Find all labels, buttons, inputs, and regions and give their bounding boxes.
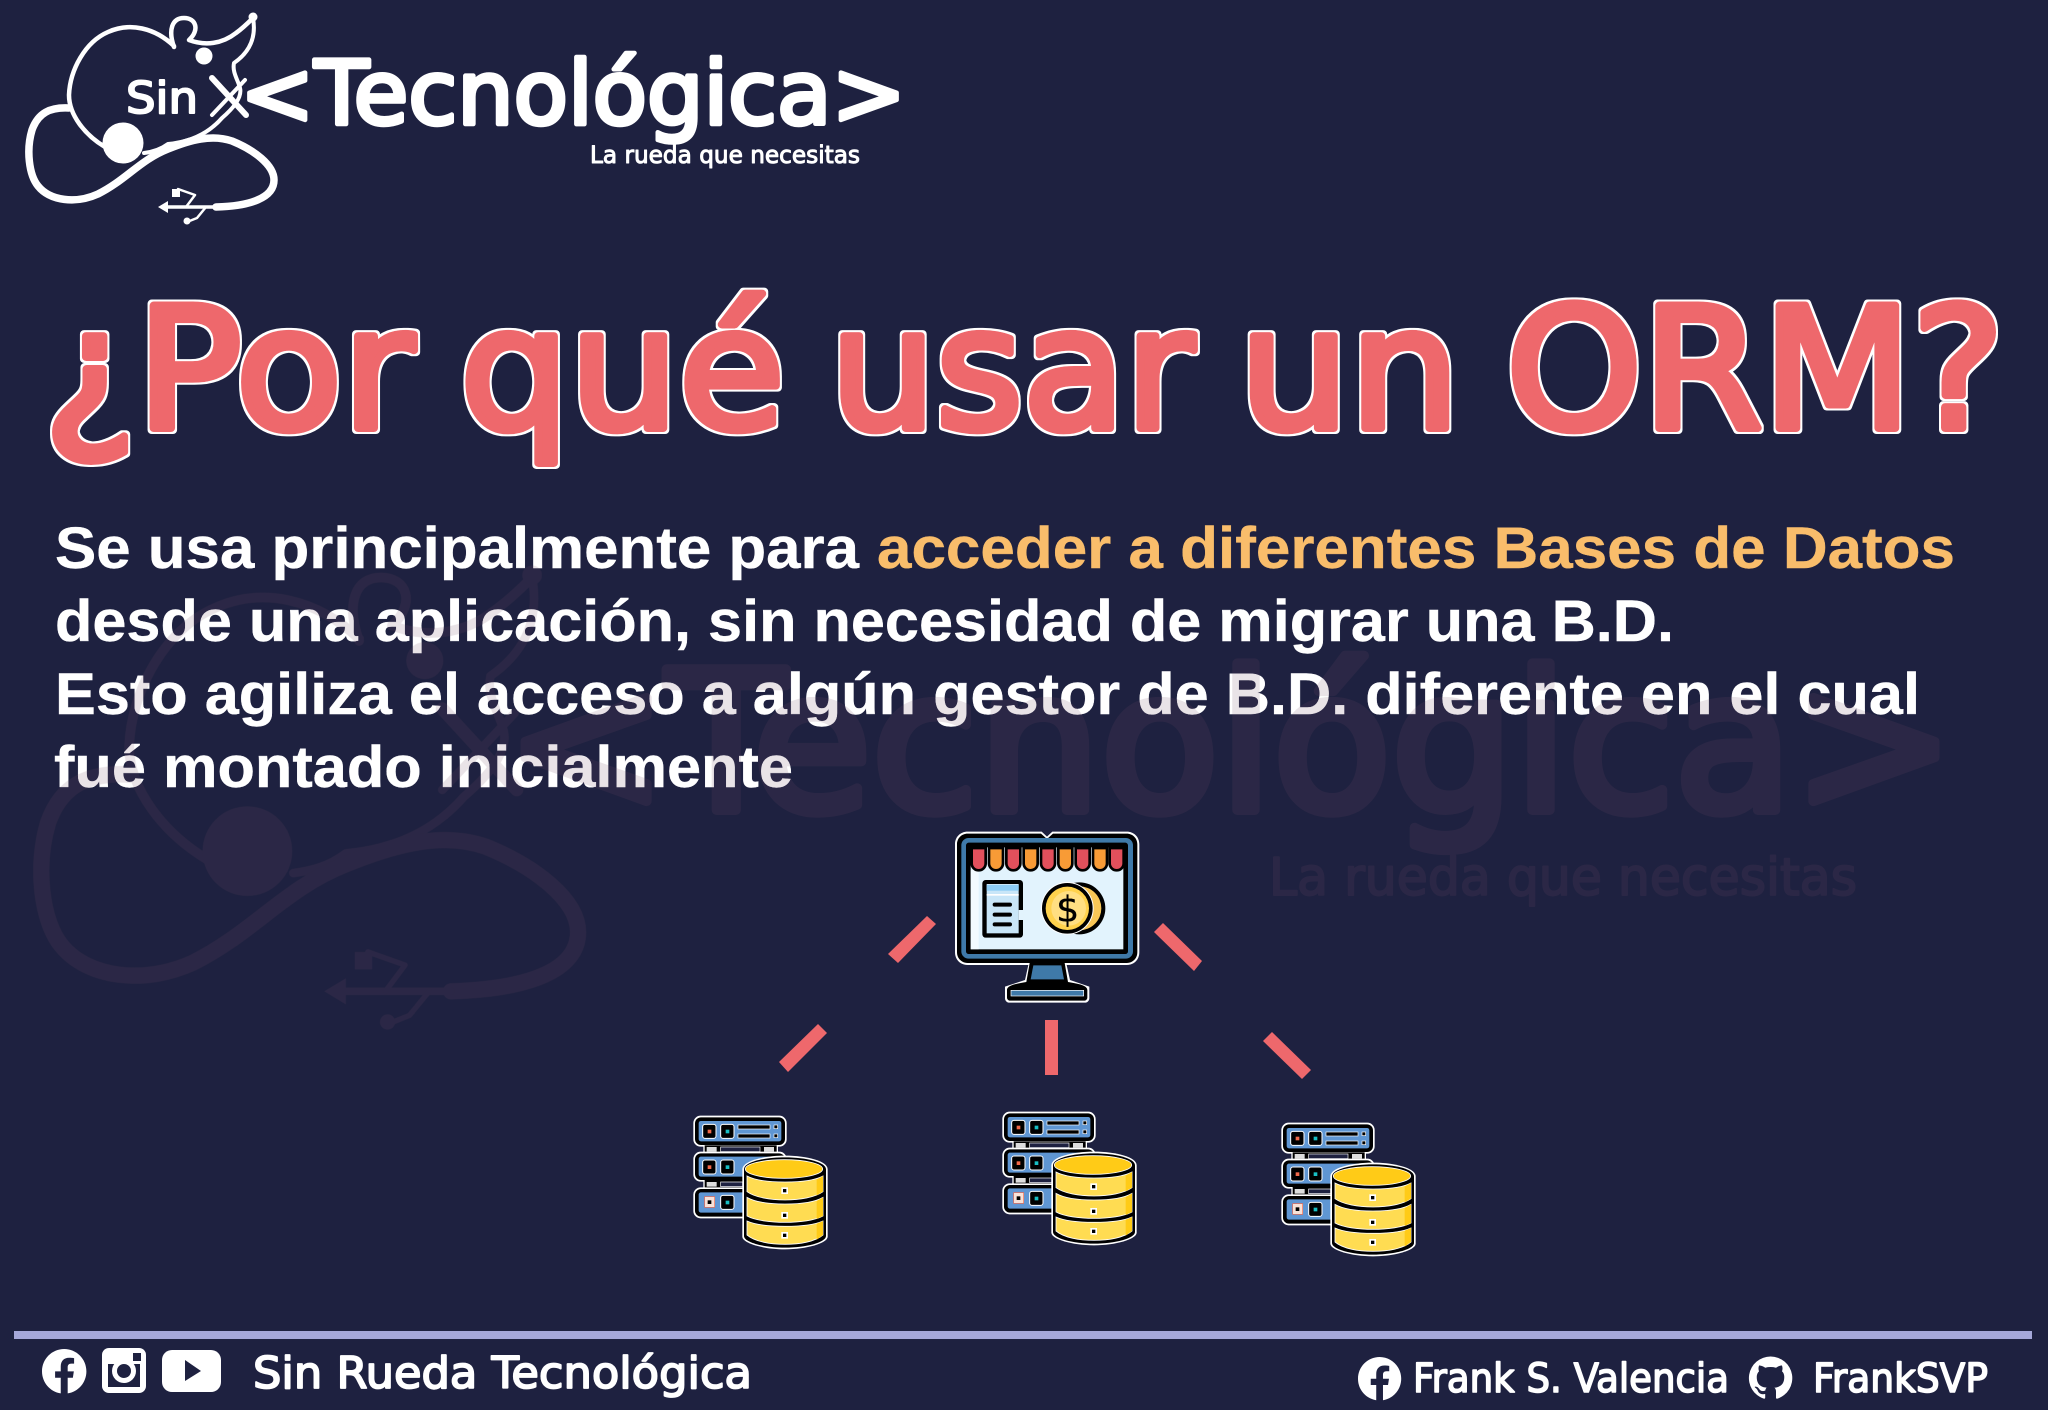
dash upper left bbox=[888, 916, 936, 963]
logo word: Sin: Sin bbox=[126, 73, 198, 124]
text block: description: acceder a diferentes Bases de Datos bbox=[877, 516, 1955, 581]
github username: FrankSVP bbox=[1813, 1356, 1988, 1402]
dash center bbox=[1045, 1020, 1058, 1075]
dash lower left bbox=[779, 1024, 827, 1072]
watermark logo bbox=[41, 565, 1955, 1030]
title: qué bbox=[460, 272, 785, 468]
text block: description: desde una aplicación, sin necesidad de migrar una B.D. bbox=[55, 589, 1674, 654]
coin: $ bbox=[1056, 889, 1079, 930]
watermark wordmark: <Tecnológica> bbox=[505, 631, 1955, 856]
watermark mouse bbox=[41, 565, 578, 1030]
footer channel name: Sin Rueda Tecnológica bbox=[253, 1348, 752, 1399]
icon: facebook bbox=[42, 1349, 86, 1393]
title: ORM? bbox=[1506, 272, 2004, 468]
dash upper right bbox=[1154, 923, 1202, 971]
title: un bbox=[1239, 272, 1460, 468]
logo tagline: La rueda que necesitas bbox=[590, 141, 860, 169]
icon: facebook author bbox=[1358, 1357, 1401, 1400]
icon: database server right bbox=[1281, 1123, 1416, 1256]
shop awning bbox=[972, 848, 1124, 870]
footer right: author bbox=[1358, 1356, 1988, 1402]
title: usar bbox=[830, 272, 1195, 468]
title: ¿Por bbox=[44, 272, 415, 468]
logo wordmark: <Tecnológica> bbox=[240, 42, 906, 145]
icon: computer monitor with shop bbox=[955, 832, 1139, 1003]
text block: description: fué montado inicialmente bbox=[54, 735, 793, 800]
icon: mouse with USB cable bbox=[29, 12, 274, 224]
connector: dashed lines bbox=[779, 916, 1311, 1079]
logo: Sin Rueda Tecnológica bbox=[29, 12, 906, 224]
document bbox=[982, 880, 1023, 938]
icon: database server center bbox=[1002, 1112, 1137, 1245]
dash lower right bbox=[1263, 1032, 1311, 1079]
coin bbox=[1041, 882, 1105, 935]
author name: Frank S. Valencia bbox=[1413, 1356, 1729, 1402]
footer divider bbox=[14, 1331, 2032, 1339]
text block: description: Se usa principalmente para bbox=[55, 516, 860, 581]
text block: description bbox=[54, 516, 1955, 800]
icon: youtube bbox=[162, 1350, 221, 1392]
title bbox=[44, 272, 2004, 468]
watermark tagline: La rueda que necesitas bbox=[1269, 848, 1857, 908]
icon: github bbox=[1749, 1357, 1792, 1399]
icon: database server left bbox=[693, 1116, 828, 1249]
text block: description: Esto agiliza el acceso a algún gestor de B.D. diferente en el cual bbox=[55, 662, 1920, 727]
icon: instagram bbox=[102, 1348, 146, 1393]
footer left: social bbox=[42, 1348, 752, 1399]
stand base bbox=[1011, 990, 1084, 996]
